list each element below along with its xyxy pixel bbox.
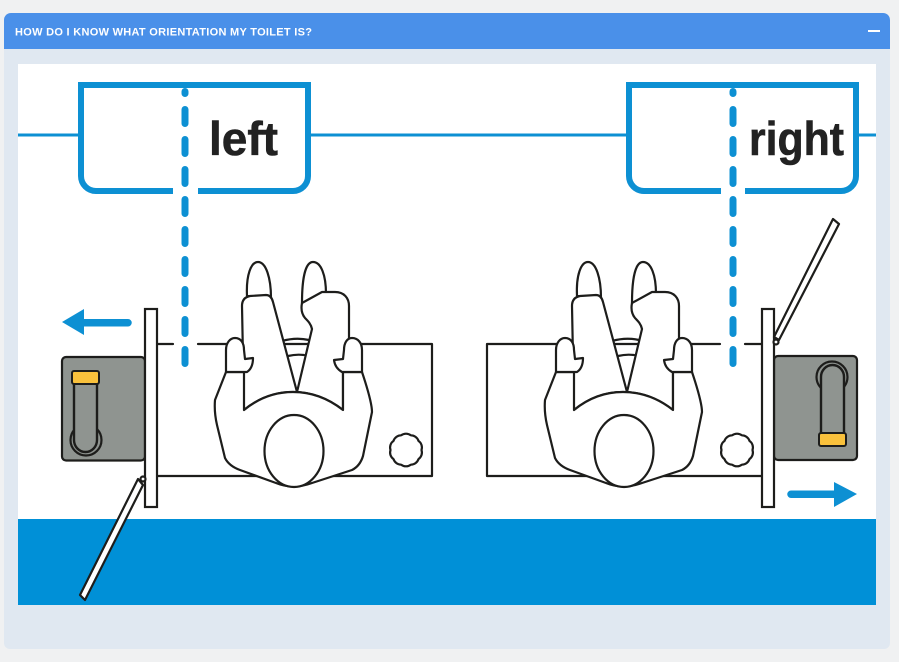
floor band [18,519,876,605]
cistern outline left [81,85,308,191]
label: left: left [209,112,278,165]
arrow right [787,482,857,507]
door panel right [774,219,839,344]
centre line left [182,92,188,94]
header bar [4,13,890,49]
handle left [70,371,102,456]
centre line right [730,92,736,94]
horizontal wall line [18,134,876,136]
door panel left [80,476,146,600]
label: right: right [749,112,844,165]
floor plan table left [157,344,432,476]
person left [215,262,372,487]
heading: HOW DO I KNOW WHAT ORIENTATION MY TOILET IS? [15,26,312,38]
toilet brush holder left [390,434,422,466]
door right [762,309,774,507]
icon: collapse minus [868,30,880,32]
cistern left [62,357,145,460]
illustration panel [18,64,876,605]
toilet brush holder right [721,434,753,466]
cistern right [774,356,857,460]
left diagram [62,85,432,600]
head [264,415,324,487]
head [594,415,654,487]
door left [145,309,157,507]
cistern outline right [629,85,856,191]
floor plan table right [487,344,762,476]
right diagram [487,85,857,507]
handle right [816,362,848,446]
person right [545,262,702,487]
arrow left [62,309,132,335]
